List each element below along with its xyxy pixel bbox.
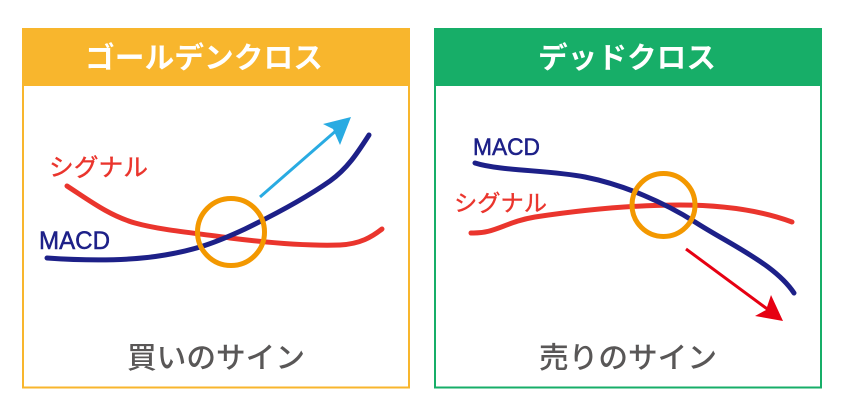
panel frame: [23, 29, 409, 388]
label: MACD: MACD: [473, 134, 540, 161]
arrow: upward: [260, 117, 351, 197]
heading: dead cross: デッドクロス: [538, 41, 716, 75]
label: signal: シグナル: [454, 190, 547, 216]
signal line: [67, 186, 382, 245]
panel: dead cross: [434, 28, 822, 388]
signal line: [471, 205, 792, 233]
label: MACD: MACD: [39, 227, 110, 255]
caption: sell signal: 売りのサイン: [539, 342, 717, 375]
panel frame: [435, 29, 821, 388]
MACD line: [47, 135, 369, 260]
caption: buy signal: 買いのサイン: [127, 342, 305, 375]
arrow: downward: [686, 249, 783, 321]
crossover circle: [198, 198, 264, 266]
MACD line: [475, 163, 794, 293]
panel: golden cross: [22, 28, 410, 388]
label: signal: シグナル: [49, 154, 148, 182]
heading: golden cross: ゴールデンクロス: [85, 41, 323, 75]
header bar: [434, 28, 822, 86]
header bar: [22, 28, 410, 86]
crossover circle: [632, 174, 695, 236]
